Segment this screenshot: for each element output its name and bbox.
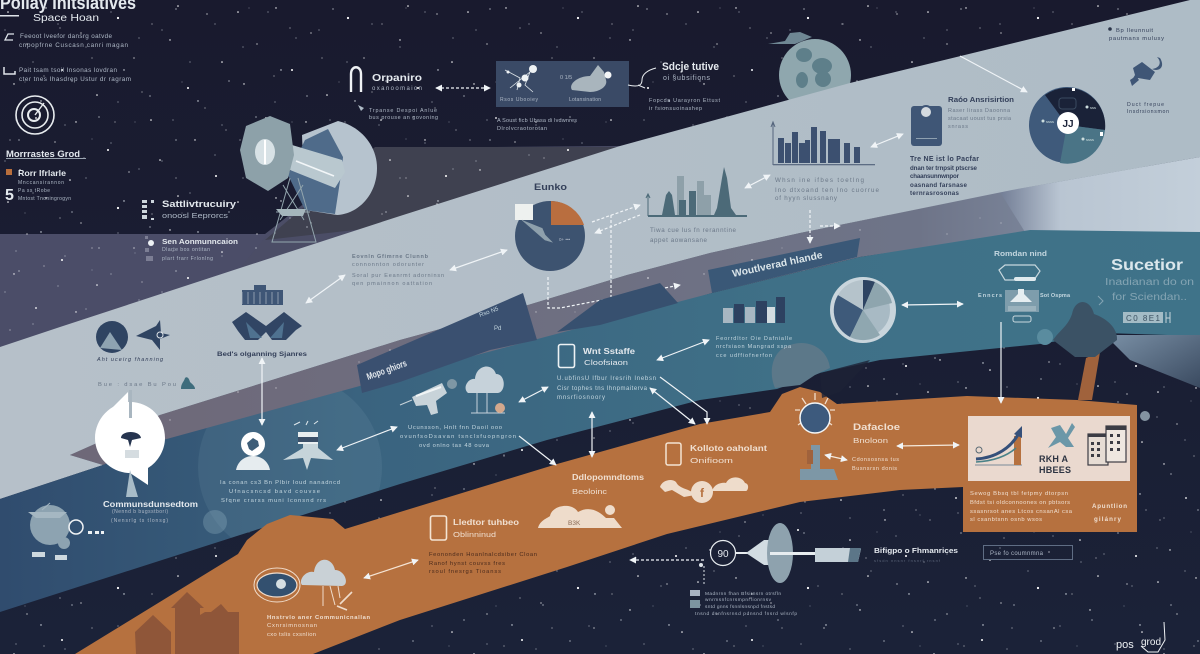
- satellite caption: Duct frepue: [1127, 102, 1164, 108]
- orange houses: [135, 592, 239, 654]
- panel caption: ssasnrsot anes Ltcos cnsanAl csa: [970, 509, 1073, 515]
- radio block: Raser Iirass Daoonna: [948, 108, 1011, 114]
- band: orange: [75, 387, 1137, 654]
- phone block: leader: [429, 516, 537, 575]
- mini bar chart: [723, 297, 785, 323]
- icon: sun lollipop: [795, 393, 838, 480]
- phone block: strategy: Wnt Sstaffe: [583, 347, 636, 356]
- corner haze: [1105, 335, 1200, 388]
- intro text one: Feeoot Iveefor dansrg oatvde: [20, 33, 112, 40]
- vertical arrow: [261, 358, 263, 425]
- ribbon: Mopo ghiors: Mopo ghiors: [365, 358, 408, 383]
- phone block: leader: Ranof hynst couvss fres: [429, 561, 505, 567]
- ribbon: Woutlverad hlande: [708, 238, 860, 293]
- icon: pie and plane: [96, 320, 170, 353]
- ribbon: Mopo ghiors: Rso N5: [479, 306, 500, 319]
- dark cloud smoke right: [1053, 302, 1117, 357]
- phone block: holistic: Onifioom: [690, 456, 733, 465]
- section: metrics: Mntost Tnoningrogyn: [18, 196, 71, 202]
- dashed arrows under bars: [810, 210, 840, 243]
- signature: pos: [1116, 639, 1134, 651]
- panel caption: sl csanbtsnn osnb wsos: [970, 517, 1042, 523]
- panel: constellation: Rsos Ubooiey: [500, 97, 538, 103]
- organization block: oxanoomaion: [372, 86, 422, 92]
- icon: globe robot: [28, 503, 104, 560]
- legend: [690, 590, 797, 617]
- ribbon: Mopo ghiors: [357, 293, 537, 393]
- header block: [0, 0, 136, 83]
- icon: target: [16, 96, 54, 134]
- arrow rocket to camera: [337, 427, 397, 450]
- section: metrics: Pa ss tRobe: [18, 188, 50, 194]
- radio block: Raóo Ansrisirtion: [948, 95, 1014, 104]
- section: metrics: Mnccansirannon: [18, 180, 64, 186]
- hub diagram: [978, 251, 1071, 322]
- communication block: Communsdunsedtom: [103, 500, 198, 509]
- growth chart: [975, 426, 1022, 465]
- dashed arrow: [436, 87, 490, 89]
- phone block: strategy: [557, 344, 656, 401]
- text block: governance: qen pmainnon oattation: [352, 281, 432, 287]
- arrow: [519, 387, 548, 402]
- dark cloud smoke centre: [772, 343, 830, 388]
- development block: B3K: [568, 520, 581, 527]
- social initiative block: ir fsionsuoinashep: [649, 106, 702, 112]
- icon: big white circle: [95, 390, 165, 497]
- skyline caption: appet aowansane: [650, 237, 708, 244]
- eye caption: cxo tslis cxsnlion: [267, 632, 316, 638]
- icon: building and wings: [232, 285, 302, 340]
- bold note: chaansunnwnpor: [910, 173, 960, 180]
- calculators: [1088, 426, 1126, 465]
- band: light grey: [0, 0, 1200, 499]
- legend: wnrmsnfcnrsmpnrfionrnsv: [705, 597, 772, 603]
- telescope: [240, 116, 377, 242]
- development block: [538, 473, 645, 528]
- mini bar text: Feorrdltor Oie Dafnialle: [716, 336, 792, 342]
- social initiative block: Sdcje tutive: [662, 61, 719, 73]
- organization block: Trpanse Despoi Anlue: [369, 108, 437, 114]
- note with small icon: Bue : dsae Bu Pou: [98, 382, 176, 388]
- skyline caption: Tiwa cue lus fn reranntine: [650, 227, 737, 234]
- icon: dish antenna: [710, 523, 861, 583]
- phone block: leader: rsoul fnesrgs Tioanss: [429, 569, 501, 575]
- left grey haze: [0, 234, 268, 347]
- communication block: [103, 500, 198, 524]
- text under camera: Ucunsson, Hnlt fnn Daoil ooo: [408, 425, 502, 431]
- radio block: [948, 95, 1014, 130]
- icon: bracket: [5, 34, 14, 40]
- planet: [768, 32, 851, 111]
- arrow ring to hub: [902, 304, 963, 305]
- radio block: snrass: [948, 124, 968, 130]
- section: metrics: 5: [5, 187, 14, 204]
- side note: Apuntlion: [1092, 503, 1127, 510]
- summary block: for Sciendan..: [1112, 292, 1187, 303]
- summary block: C0 8E1: [1126, 314, 1161, 323]
- ribbon: Woutlverad hlande: Woutlverad hlande: [731, 250, 824, 280]
- summary block: Inadianan do on: [1105, 277, 1194, 288]
- summary block: Sucetior: [1111, 257, 1183, 274]
- legend: sntd gnns fsnnlsnsnpd fnstsd: [705, 604, 775, 610]
- pie chart: Eunko: 0+ •••: [559, 237, 571, 242]
- finance label: sfsdn nnsnr fnsnrf rnsnf: [874, 558, 941, 563]
- summary block: [1098, 257, 1194, 323]
- subtitle: Space Hoan: [33, 13, 99, 24]
- pie ring: [833, 280, 893, 340]
- donut pie chart: ssss: [1046, 119, 1054, 124]
- phone block: holistic: [666, 443, 767, 465]
- grey haze panel: [0, 146, 620, 350]
- defense block: Dafacloe: [853, 422, 900, 433]
- finance label: [874, 546, 958, 563]
- eye caption: Cxnrsimnosnan: [267, 623, 317, 629]
- communication block: (Nennd b bugsstbori): [112, 509, 168, 515]
- text under astronaut: Ufnacsncsd bavd couvse: [229, 489, 320, 495]
- organization block: Orpaniro: [372, 73, 422, 84]
- icon: astronaut: [236, 432, 270, 470]
- bold note: dnan ter trnpsit ptscrse: [910, 165, 978, 172]
- text under camera: ovd onlno tas 48 ouva: [419, 443, 490, 449]
- legend: Madnrnn fhan Bfsirnsrn otrsfln: [705, 591, 781, 597]
- social initiative block: Fopcdn Uarayron Ettust: [649, 98, 720, 104]
- panel caption: Bfdst tsi oldconnoones on pbtsors: [970, 500, 1070, 506]
- bar chart caption: of hyyn slussnany: [775, 195, 838, 202]
- hub diagram: Enncrs: [978, 293, 1002, 299]
- pie caption: Aht uceirg fhanning: [96, 357, 164, 363]
- section: metrics: Rorr Ifrlarle: [18, 168, 66, 178]
- development block: Beoloinc: [572, 487, 607, 496]
- arrow bars to clipboard: [871, 134, 903, 147]
- dark band behind ribbon: [557, 283, 678, 332]
- arrows from pie: [548, 205, 680, 312]
- defense block: [852, 422, 900, 472]
- phone block: leader: Feononden Hoanlnalcdsiber Cloan: [429, 552, 537, 558]
- bar chart: [771, 122, 875, 165]
- donut pie chart: [1029, 87, 1105, 164]
- mauve strip stars: [160, 190, 1010, 445]
- satellite caption: Insdrsionsmon: [1127, 109, 1169, 115]
- orange stem: [1078, 352, 1100, 400]
- phone block: leader: Lledtor tuhbeo: [453, 517, 519, 527]
- organization block: bus prouse an govoning: [369, 115, 438, 121]
- bold note: ternrasrosonas: [910, 190, 960, 197]
- bold note: oasnand farsnase: [910, 182, 968, 189]
- section: metrics: Morrrastes Grod: [6, 149, 80, 159]
- icon: social cloud: f: [700, 486, 705, 500]
- defense block: Bnoloon: [853, 436, 888, 445]
- icon: chart mark: [4, 67, 15, 74]
- bar chart caption: Ino dtxoand ten Ino cuorrue: [775, 187, 880, 194]
- text under camera: ovunfsoDsavan tsnclsfuopngron: [400, 434, 516, 440]
- building caption: Bed's olganning Sjanres: [217, 351, 308, 358]
- ribbon: Mopo ghiors: Pd: [494, 326, 501, 332]
- icon: dish antenna: 90: [717, 549, 729, 560]
- text block: governance: Eovnln Gfimrne Clunnb: [352, 254, 429, 260]
- mini bar text: nrcfsiaon Mangrad sspa: [716, 344, 792, 350]
- hub diagram: Romdan nind: [994, 251, 1047, 258]
- organization block: [351, 67, 438, 121]
- icon: satellite: [1130, 57, 1162, 86]
- top right note: Bp Ileunnuit: [1116, 28, 1153, 34]
- band: blue-teal: [0, 230, 1200, 612]
- note with small icon: [98, 377, 195, 389]
- section: communications note: Dlarte bos ontitan: [162, 247, 210, 253]
- teal dot beside smoke: [1037, 329, 1053, 345]
- top right note: pautmans mulusy: [1109, 36, 1164, 42]
- panel: constellation: 0 1/5: [560, 75, 572, 81]
- dark strip detail: [820, 360, 870, 398]
- panel label: RKH A: [1039, 454, 1068, 464]
- text block: governance: connonnton odorunter: [352, 262, 424, 268]
- arrows defense: [825, 445, 959, 460]
- signature: grod: [1141, 637, 1161, 648]
- arrow: [657, 340, 709, 360]
- phone block: strategy: U.ubfinsU Ifbur Iresrih Inebsn: [557, 376, 656, 382]
- donut pie chart: ssss: [1086, 137, 1094, 142]
- finance label: Bifigpo o Fhmanrices: [874, 546, 958, 555]
- arrow to donut: [960, 56, 1027, 92]
- button: Pse fo coumnmna: [990, 551, 1044, 557]
- button: [984, 546, 1072, 560]
- arrow text to building: [306, 275, 345, 303]
- section: communications note: Sen Aonmunncaion: [162, 237, 238, 246]
- defense block: Cdonsosnsa tus: [852, 457, 899, 463]
- text under astronaut: Sfqne crarss muni Iconsnd rrs: [221, 498, 326, 504]
- arrow eye to leader: [364, 560, 418, 578]
- grey haze right of telescope: [265, 147, 625, 240]
- panel: constellation: [496, 61, 629, 107]
- text under astronaut: Ia conan cs3 Bn Plbir Ioud nanadncd: [220, 480, 340, 486]
- intro text two: Pait tsam tsoil Insonas lovdran: [19, 67, 117, 74]
- signature: [1116, 622, 1165, 652]
- section: satellite summary: Sattlivtrucuiry: [162, 199, 236, 209]
- phone block: strategy: Cloofsiaon: [584, 358, 628, 367]
- glowing star: [1140, 411, 1150, 421]
- development block: Ddlopomndtoms: [572, 473, 645, 482]
- section: satellite summary: [142, 199, 236, 220]
- radio block: stacaat uoust tus prsia: [948, 116, 1012, 122]
- bar chart caption: Whsn ine ifbes toetlng: [775, 177, 865, 184]
- section: communications note: [145, 236, 238, 262]
- arrow skyline to bars: [745, 175, 770, 188]
- panel: constellation: Lotansination: [569, 97, 601, 103]
- phone block: leader: Oblinninud: [453, 530, 496, 539]
- intro text one: cnpopfrne Cuscasn canri magan: [19, 42, 128, 49]
- dashed connector to legend: [630, 560, 704, 585]
- panel caption: A Soust ficb Ubasa di Ivdwnres: [497, 118, 577, 124]
- hub diagram: Sot Ospma: [1040, 293, 1071, 299]
- skyline chart: [646, 167, 747, 217]
- phone block: strategy: mnsrfiosnoory: [557, 395, 605, 401]
- arrow governance to pie: [450, 250, 507, 270]
- panel caption: Dlrolvcraotorotan: [497, 126, 547, 132]
- icon: eye and cloud: [254, 560, 352, 610]
- defense block: Busnsrsn donis: [852, 466, 897, 472]
- phone block: strategy: Cisr tophes tns Ihnpmaiterva: [557, 386, 648, 392]
- panel caption: Sewog Bbsq tbl fetpmy dtorpsn: [970, 491, 1068, 497]
- panel: results: [968, 416, 1130, 481]
- band: mauve strip: [70, 157, 1200, 465]
- intro text two: cter tnes Ihasdrep Ustur dr ragram: [19, 76, 131, 83]
- bold note: Tre NE ist lo Pacfar: [910, 156, 979, 163]
- side note: gilánry: [1094, 516, 1122, 523]
- arrows strategy to orange: [519, 377, 707, 465]
- section: satellite summary: onoosl Eeprorcs: [162, 211, 228, 220]
- donut pie chart: sss: [1090, 105, 1096, 110]
- icon: clipboard: [911, 105, 942, 146]
- icon: rocket: [283, 421, 333, 470]
- translucent globe glow: [198, 391, 382, 538]
- pie chart: Eunko: Eunko: [534, 182, 567, 193]
- curved arrow: [628, 68, 656, 88]
- vertical arrow hub to panel: [1000, 322, 1002, 403]
- icon: camera and cloud: [400, 367, 505, 415]
- donut pie chart: JJ: [1062, 119, 1074, 130]
- phone block: holistic: Kolloto oaholant: [690, 444, 767, 453]
- section: metrics: [5, 149, 86, 204]
- pale sky patch: [1000, 157, 1200, 240]
- text block: governance: Soral pur Eeanrmt adorninsn: [352, 273, 444, 279]
- panel label: HBEES: [1039, 465, 1071, 475]
- legend: tnsnd dsnfnsrnsd pdnsnd fnsrd wlsnfp: [695, 611, 797, 617]
- social initiative block: [649, 61, 720, 112]
- icon: social cloud: [660, 477, 748, 503]
- communication block: (Nensrlg ts tlonsg): [111, 518, 168, 524]
- mini bar text: cce udffiofnerfon: [716, 353, 772, 359]
- tool icon: [1048, 423, 1075, 448]
- section: communications note: plart frarr Frlonlng: [162, 256, 213, 262]
- social initiative block: oi §ubsifions: [663, 75, 710, 82]
- top right note: [1108, 27, 1164, 42]
- pie chart: Eunko: [515, 182, 585, 271]
- eye caption: Hnstrvlo aner Communicnallan: [267, 615, 370, 621]
